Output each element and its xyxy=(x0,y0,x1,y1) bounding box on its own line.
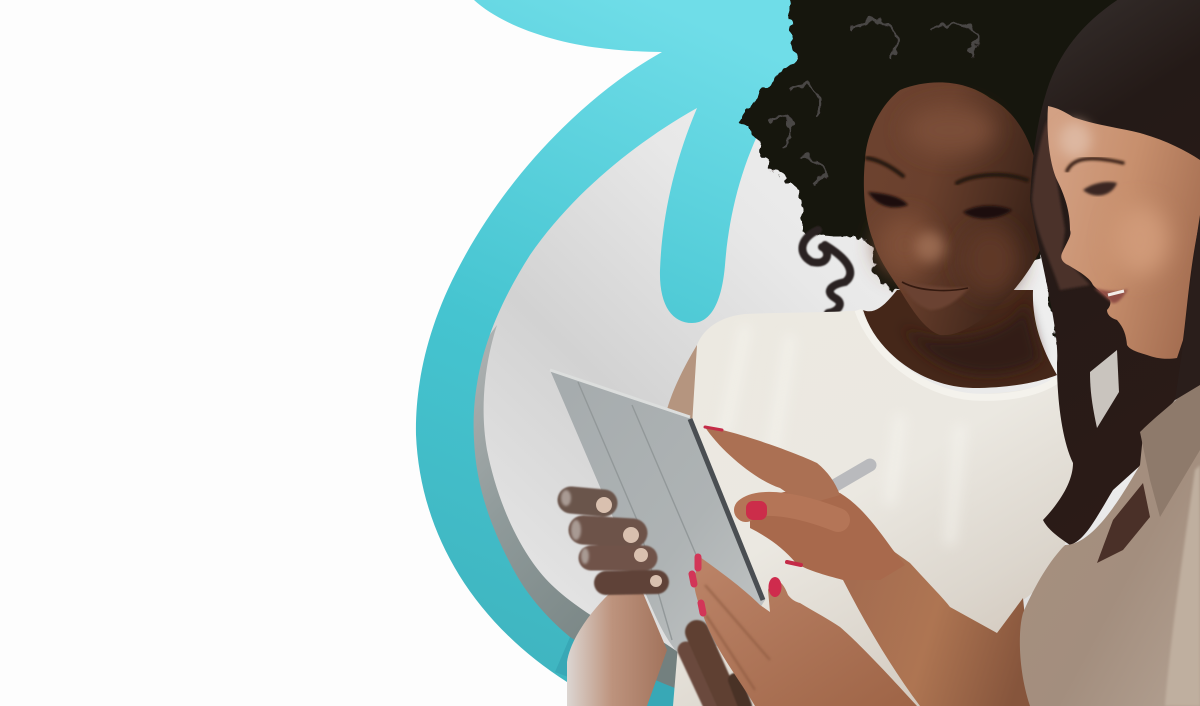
woman 1 fingernails xyxy=(596,497,662,587)
woman 1 neckline band xyxy=(858,310,1057,397)
woman 2 upper hand xyxy=(705,427,905,580)
cheek highlights xyxy=(877,215,933,275)
woman 1 face xyxy=(864,82,1041,335)
woman 1 neck xyxy=(863,290,1057,388)
woman 1 curly hair xyxy=(740,0,1125,345)
woman 2 forearm xyxy=(843,520,1034,706)
right sleeve xyxy=(1165,465,1200,706)
woman 2 lower hand xyxy=(692,557,917,706)
dark shirt opening xyxy=(1097,483,1150,563)
woman 2 hair strand xyxy=(1175,215,1200,400)
nose highlight xyxy=(915,232,945,262)
hair highlights xyxy=(770,22,976,185)
woman 1 blouse folds xyxy=(725,330,960,540)
ringlets xyxy=(802,230,850,313)
gap in hair xyxy=(1090,350,1119,428)
woman 2 hair xyxy=(1030,0,1200,545)
grey circle backdrop xyxy=(462,0,1200,706)
eyes xyxy=(868,192,1012,219)
eyebrow xyxy=(1067,159,1123,171)
woman 2 shirt xyxy=(1020,372,1200,706)
woman 1 neck shadow xyxy=(900,300,1040,374)
woman 1 finger highlights xyxy=(561,490,589,564)
eye xyxy=(1083,182,1117,196)
lips xyxy=(900,280,970,310)
woman 1 white top xyxy=(673,310,1079,706)
forehead and cheek highlights xyxy=(1059,122,1091,158)
woman 2 side hair lighter xyxy=(1032,120,1090,290)
stylus xyxy=(810,465,870,500)
brows xyxy=(867,158,1027,183)
woman 1 fingers on tablet xyxy=(571,500,745,706)
arrow inner shadow band xyxy=(450,325,690,692)
woman 1 forearm xyxy=(567,593,667,706)
woman 1 upper arm xyxy=(666,345,697,425)
teal arrow xyxy=(416,0,800,706)
woman 2 face xyxy=(1047,106,1200,359)
mouth xyxy=(1094,288,1128,303)
arrow tail at bottom xyxy=(555,637,680,706)
lower left-hand fingers xyxy=(686,650,712,706)
tablet xyxy=(550,370,765,655)
collar xyxy=(1140,375,1200,517)
